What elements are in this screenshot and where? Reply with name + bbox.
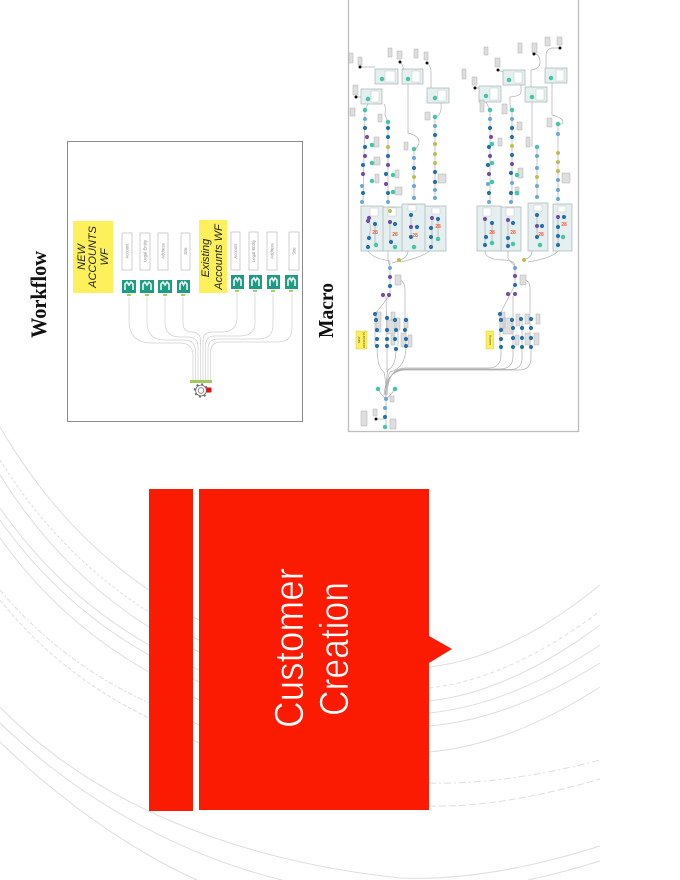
- connector lines: [356, 48, 563, 427]
- panel: workflow: [68, 142, 302, 422]
- output labels: [122, 232, 299, 270]
- blue nodes: [363, 128, 564, 417]
- white inner documents: [370, 70, 566, 216]
- red title panel with pointer: [199, 489, 452, 810]
- orange number nodes: 28: [392, 232, 398, 238]
- background arcs: [0, 427, 600, 880]
- icon: red badge: [206, 388, 212, 392]
- input anchor bar: [190, 380, 212, 383]
- teal nodes: [365, 78, 563, 427]
- orange number nodes: 28: [538, 232, 544, 238]
- title: Customer Creation: Creation: [311, 582, 357, 716]
- note: existing accounts: Existing: [200, 238, 212, 277]
- orange number nodes: [372, 222, 567, 239]
- orange number nodes: 28: [372, 230, 378, 236]
- note: new accounts: WF: [99, 247, 111, 266]
- heading: Macro: Macro: [314, 283, 338, 338]
- output labels: Address: [270, 243, 274, 259]
- orange number nodes: 28: [412, 233, 418, 239]
- light blue nodes: [362, 119, 558, 408]
- note: existing accounts: [199, 220, 227, 293]
- output labels: Account: [233, 243, 238, 259]
- panel: macro: [348, 0, 578, 432]
- note: new accounts: ACCOUNTS: [87, 225, 99, 289]
- output tool icons: [122, 275, 298, 295]
- heading: Workflow: Workflow: [26, 251, 51, 338]
- output labels: Account: [124, 243, 130, 259]
- output labels: Site: [183, 247, 188, 255]
- orange number nodes: 28: [489, 230, 495, 236]
- output labels: Legal Entity: [251, 239, 256, 262]
- output labels: Legal Entity: [142, 239, 148, 262]
- note: new accounts tag: NEW: [357, 336, 361, 343]
- title: Customer Creation: [266, 568, 357, 728]
- output labels: Address: [160, 243, 166, 259]
- title: Customer Creation: Customer: [266, 568, 312, 728]
- annotation boxes: [349, 37, 570, 429]
- note: existing accounts tag: [486, 331, 494, 349]
- note: existing accounts: Accounts WF: [213, 223, 225, 291]
- note: new accounts: [73, 221, 113, 293]
- olive nodes: [388, 144, 558, 260]
- orange number nodes: 28: [510, 230, 516, 236]
- note: new accounts: NEW: [76, 243, 88, 270]
- black node dots: [356, 48, 560, 419]
- red side bar: [149, 489, 193, 811]
- macro workflow diagram: [349, 37, 572, 429]
- purple nodes: [363, 137, 558, 295]
- note: new accounts tag: ACCOUNTS: [362, 332, 366, 348]
- connectors to workflow input: [129, 293, 292, 381]
- orange number nodes: 28: [561, 222, 567, 228]
- orange number nodes: 28: [435, 224, 441, 230]
- container tool groups: [361, 68, 572, 251]
- icon: gear: [195, 384, 207, 397]
- note: new accounts tag: [356, 331, 367, 349]
- note: existing accounts tag: Existing: [488, 335, 492, 345]
- output labels: Site: [292, 247, 296, 255]
